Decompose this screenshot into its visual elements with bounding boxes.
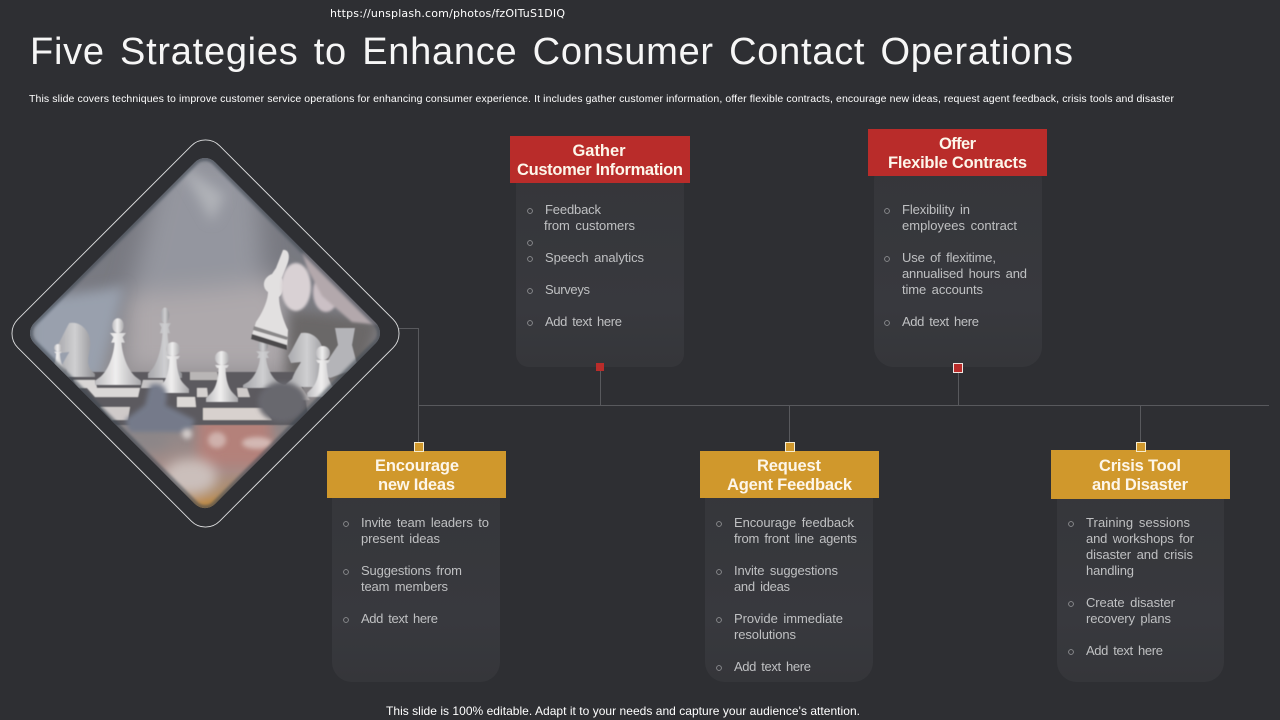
list text <box>902 202 1027 329</box>
card background <box>705 470 873 682</box>
bullets <box>528 209 532 325</box>
blurred foreground pieces <box>125 382 306 449</box>
list text: from front line agents <box>734 531 858 546</box>
card background <box>874 160 1042 367</box>
marker: offer <box>954 364 962 372</box>
list text: Use of flexitime, <box>902 250 996 265</box>
list text: Provide immediate <box>734 611 843 626</box>
header <box>700 451 879 498</box>
panel: encourage new ideas <box>327 451 506 682</box>
marker: crisis <box>1136 442 1146 452</box>
heading: Gather <box>572 142 626 160</box>
list text: Add text here <box>1086 643 1163 658</box>
marker: request <box>786 442 794 452</box>
header <box>1051 450 1230 499</box>
card background <box>516 170 684 367</box>
list text: resolutions <box>734 627 796 642</box>
list text <box>734 515 858 674</box>
heading <box>517 142 683 179</box>
panel: offer flexible contracts <box>868 129 1047 367</box>
marker: gather <box>596 363 604 371</box>
list text: present ideas <box>361 531 440 546</box>
heading <box>727 457 853 494</box>
bullets <box>344 522 348 622</box>
list text: employees contract <box>902 218 1017 233</box>
held king <box>251 250 289 350</box>
bullets <box>717 522 721 670</box>
photo edge bands <box>24 152 386 514</box>
list text: Training sessions <box>1086 515 1190 530</box>
list text: time accounts <box>902 282 984 297</box>
list text: Invite team leaders to <box>361 515 489 530</box>
list text <box>544 202 644 329</box>
diamond outline frame <box>4 132 407 535</box>
heading: Agent Feedback <box>727 476 853 494</box>
bullets <box>1069 522 1073 654</box>
list text: team members <box>361 579 448 594</box>
list text: Invite suggestions <box>734 563 838 578</box>
list text: from customers <box>544 218 636 233</box>
header <box>868 129 1047 176</box>
list text: Flexibility in <box>902 202 970 217</box>
list text: and ideas <box>734 579 790 594</box>
heading: Offer <box>939 135 977 153</box>
list text <box>1086 515 1195 658</box>
card background <box>332 470 500 682</box>
heading <box>375 457 459 494</box>
panel: crisis tool and disaster <box>1051 450 1230 682</box>
heading: Customer Information <box>517 161 683 179</box>
panel: gather customer information <box>510 136 690 367</box>
footer note: This slide is 100% editable. Adapt it to your needs and capture your audience's attention. <box>386 704 860 718</box>
chess board squares <box>60 372 310 425</box>
heading: Crisis Tool <box>1099 457 1181 475</box>
list text: Surveys <box>545 282 590 297</box>
bullets <box>885 209 889 325</box>
list text: Create disaster <box>1086 595 1176 610</box>
list text: Suggestions from <box>361 563 462 578</box>
list text: Speech analytics <box>545 250 644 265</box>
list text: Add text here <box>734 659 811 674</box>
chess photo in diamond <box>20 150 390 515</box>
list text: Feedback <box>545 202 602 217</box>
heading: and Disaster <box>1092 476 1189 494</box>
list text: Encourage feedback <box>734 515 854 530</box>
list text: and workshops for <box>1086 531 1195 546</box>
subtitle: This slide covers techniques to improve customer service operations for enhancing consumer experience. It includes gather customer information, offer flexible contracts, encourage new ideas, request agent feedback, crisis tools and disaster <box>29 93 1174 105</box>
list text: Add text here <box>545 314 622 329</box>
header <box>327 451 506 498</box>
list text: annualised hours and <box>902 266 1027 281</box>
list text <box>361 515 489 626</box>
heading <box>1092 457 1189 494</box>
heading: Request <box>757 457 822 475</box>
heading: Encourage <box>375 457 459 475</box>
list text: disaster and crisis <box>1086 547 1194 562</box>
heading: Flexible Contracts <box>888 154 1027 172</box>
list text: Add text here <box>361 611 438 626</box>
list text: handling <box>1086 563 1134 578</box>
title: Five Strategies to Enhance Consumer Contact Operations <box>30 31 1073 73</box>
header <box>510 136 690 183</box>
list text: recovery plans <box>1086 611 1172 626</box>
panel: request agent feedback <box>700 451 879 682</box>
card background <box>1057 470 1224 682</box>
source url: https://unsplash.com/photos/fzOITuS1DIQ <box>330 7 565 20</box>
connector lines <box>399 328 1269 445</box>
hand <box>281 252 380 325</box>
heading <box>888 135 1027 172</box>
heading: new Ideas <box>378 476 455 494</box>
marker: encourage <box>414 442 424 452</box>
list text: Add text here <box>902 314 979 329</box>
chess pieces <box>49 307 358 402</box>
